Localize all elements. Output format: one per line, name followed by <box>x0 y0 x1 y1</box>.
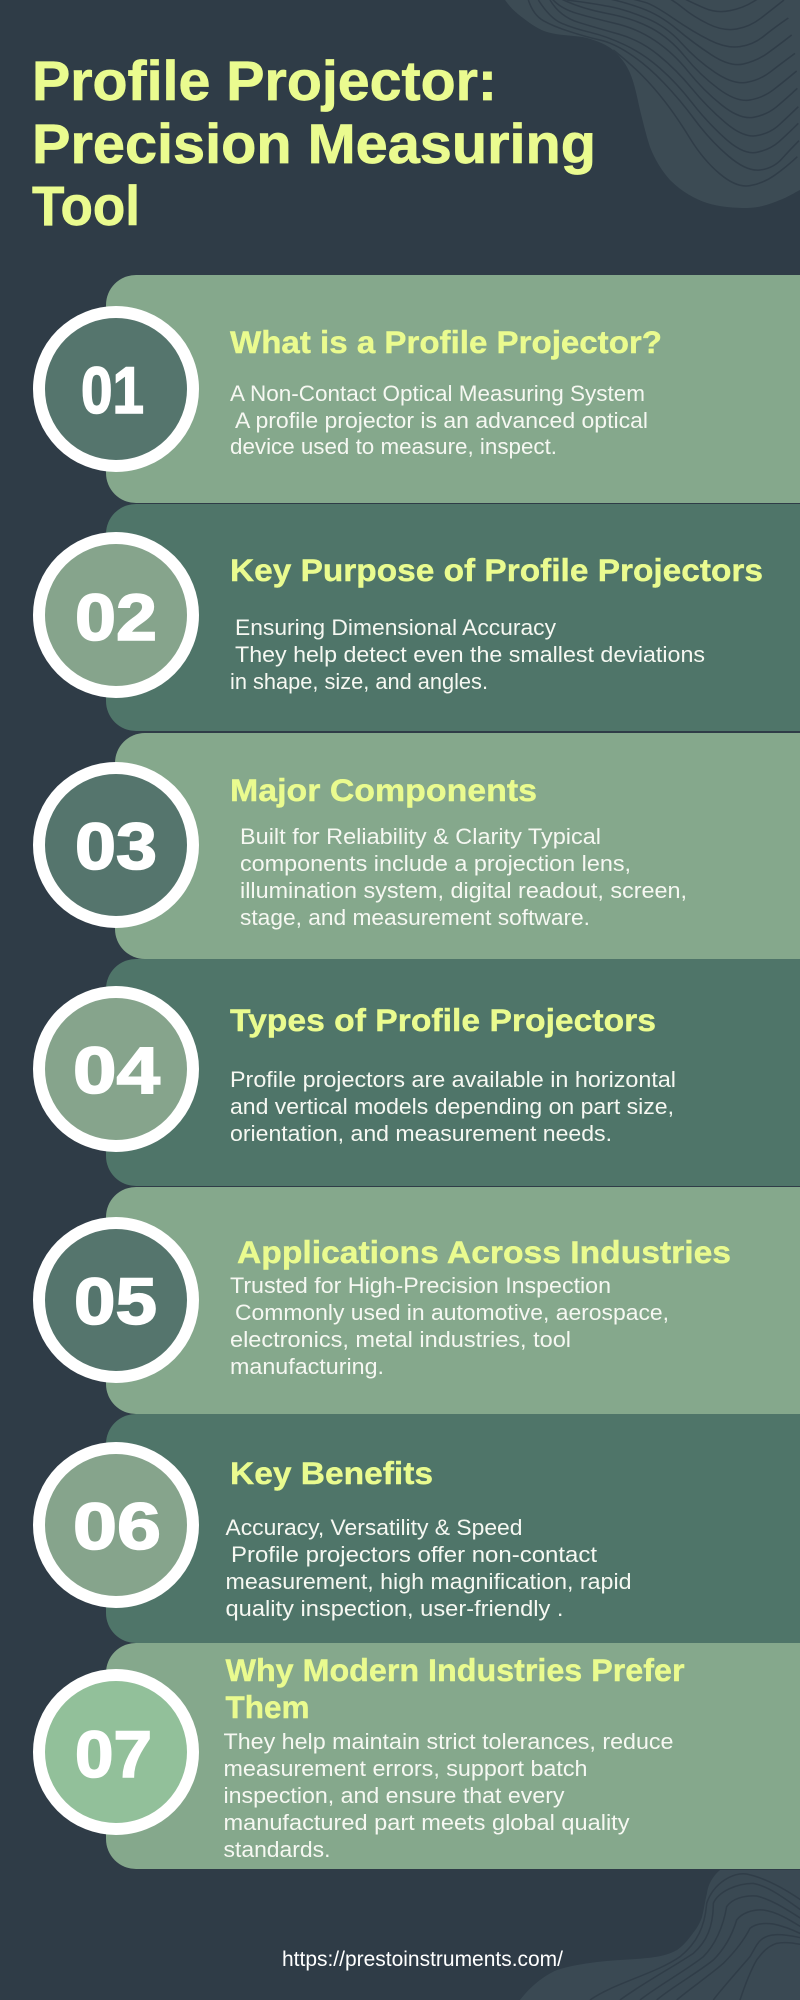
body 03: illumination system, digital readout, screen, <box>240 878 687 903</box>
badge 03: 03 <box>75 809 157 883</box>
body 05: Commonly used in automotive, aerospace, <box>235 1300 669 1325</box>
heading 01: What is a Profile Projector? <box>230 324 662 360</box>
badge 02: 02 <box>75 580 157 654</box>
heading 07: Them <box>226 1689 310 1725</box>
badge 01: 01 <box>81 353 144 427</box>
body 05: manufacturing. <box>230 1354 384 1379</box>
body 07: inspection, and ensure that every <box>224 1783 565 1808</box>
panel 07 background <box>106 1643 800 1869</box>
panel 02 background <box>106 504 800 731</box>
body 04 <box>230 1067 676 1146</box>
body 03: Built for Reliability & Clarity Typical <box>240 824 601 849</box>
body 04: and vertical models depending on part size, <box>230 1094 674 1119</box>
badge 07: 07 <box>75 1717 152 1791</box>
badge 04: 04 <box>73 1033 160 1107</box>
body 02: in shape, size, and angles. <box>230 669 488 694</box>
body 02: Ensuring Dimensional Accuracy <box>235 615 557 640</box>
body 05: Trusted for High-Precision Inspection <box>230 1273 611 1298</box>
heading 03: Major Components <box>230 772 537 808</box>
title <box>32 49 596 237</box>
decorative contour blob: top right <box>505 0 800 208</box>
badge 03 <box>39 768 193 922</box>
body 03: stage, and measurement software. <box>240 905 590 930</box>
body 02 <box>230 615 705 694</box>
title: Tool <box>32 174 140 237</box>
title: Precision Measuring <box>32 112 596 175</box>
body 06: measurement, high magnification, rapid <box>226 1569 632 1594</box>
body 03: components include a projection lens, <box>240 851 631 876</box>
badge 05 <box>39 1223 193 1377</box>
body 05: electronics, metal industries, tool <box>230 1327 571 1352</box>
body 07: standards. <box>224 1837 330 1862</box>
heading 06: Key Benefits <box>230 1455 433 1491</box>
body 07: manufactured part meets global quality <box>224 1810 630 1835</box>
body 07: measurement errors, support batch <box>224 1756 588 1781</box>
body 03 <box>240 824 687 930</box>
badge 06 <box>39 1448 193 1602</box>
panel 06 background <box>106 1414 800 1643</box>
body 05 <box>230 1273 669 1379</box>
title: Profile Projector: <box>32 49 497 112</box>
body 01 <box>230 381 648 459</box>
panel 03: major components <box>39 733 800 959</box>
body 06: Profile projectors offer non-contact <box>231 1542 598 1567</box>
panel 06: key benefits <box>39 1414 800 1643</box>
decorative contour blob: bottom right <box>520 1870 800 2000</box>
body 07: They help maintain strict tolerances, reduce <box>224 1729 674 1754</box>
panel 04: types <box>39 959 800 1186</box>
panel 04 background <box>106 959 800 1186</box>
panel 02: key purpose <box>39 504 800 731</box>
heading 05: Applications Across Industries <box>237 1234 731 1270</box>
heading 07: Why Modern Industries Prefer <box>226 1652 684 1688</box>
body 06: Accuracy, Versatility & Speed <box>226 1515 522 1540</box>
panel 05: applications <box>39 1187 800 1414</box>
panel 03 background <box>115 733 800 959</box>
body 02: They help detect even the smallest deviations <box>235 642 705 667</box>
panel 01: what is a profile projector <box>39 275 800 503</box>
badge 04 <box>39 992 193 1146</box>
body 01: A profile projector is an advanced optical <box>235 408 648 433</box>
body 04: orientation, and measurement needs. <box>230 1121 612 1146</box>
badge 05: 05 <box>74 1264 157 1338</box>
body 01: device used to measure, inspect. <box>230 434 557 459</box>
body 01: A Non-Contact Optical Measuring System <box>230 381 645 406</box>
heading 07 <box>226 1652 684 1725</box>
body 06: quality inspection, user-friendly . <box>226 1596 564 1621</box>
website footer: https://prestoinstruments.com/ <box>282 1947 563 1971</box>
badge 02 <box>39 538 193 692</box>
badge 01 <box>39 312 193 466</box>
badge 07 <box>39 1675 193 1829</box>
heading 02: Key Purpose of Profile Projectors <box>230 552 763 588</box>
body 06 <box>226 1515 632 1621</box>
panel 07: why modern industries prefer them <box>39 1643 800 1869</box>
heading 04: Types of Profile Projectors <box>230 1002 656 1038</box>
panel 01 background <box>106 275 800 503</box>
body 07 <box>224 1729 674 1862</box>
badge 06: 06 <box>73 1489 161 1563</box>
panel 05 background <box>106 1187 800 1414</box>
body 04: Profile projectors are available in horizontal <box>230 1067 676 1092</box>
